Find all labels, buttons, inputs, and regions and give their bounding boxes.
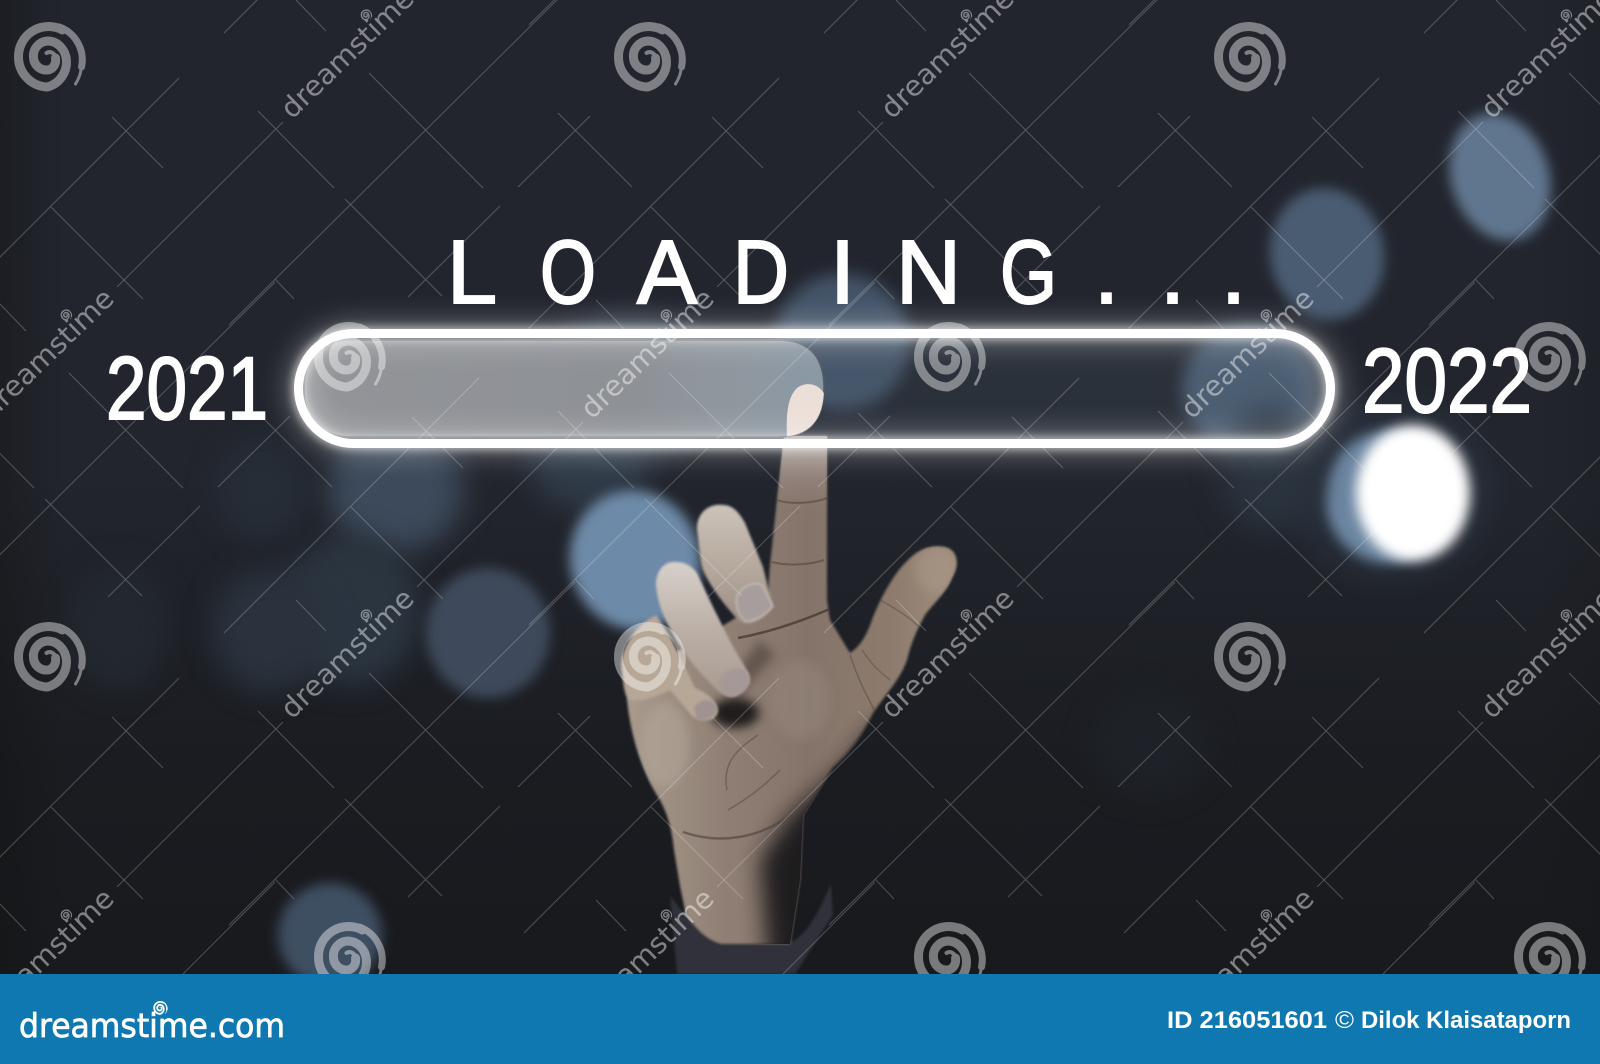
ring finger <box>656 562 750 696</box>
heading: loading: L <box>447 223 497 323</box>
heading: loading: A <box>637 223 697 323</box>
heading: loading: I <box>830 223 855 323</box>
watermark wordmarks: dreamstime <box>274 582 421 725</box>
hand pointing up <box>621 436 960 980</box>
label: year 2021: 2021 <box>106 338 268 438</box>
watermark wordmarks: dreamstime <box>1174 882 1321 1025</box>
pinky finger <box>621 615 718 720</box>
progress bar <box>298 334 1330 444</box>
footer credit: ID 216051601 <box>1167 1007 1327 1034</box>
heading: loading: O <box>540 223 596 323</box>
ring finger nail <box>719 668 749 697</box>
hand shading <box>641 436 960 980</box>
bar glass interior <box>303 338 1326 439</box>
middle finger nail <box>736 584 773 621</box>
footer credit <box>1167 1007 1571 1034</box>
watermark wordmarks: dreamstime <box>574 882 721 1025</box>
heading: loading: G <box>1000 223 1057 323</box>
pinky nail <box>694 700 717 720</box>
heading: loading: ... <box>1094 223 1246 323</box>
fingertip inside bar <box>786 384 824 436</box>
watermark wordmarks: dreamstime <box>574 282 721 425</box>
middle finger <box>697 505 773 624</box>
label: year 2022: 2022 <box>1362 331 1532 432</box>
heading: loading <box>447 223 1246 323</box>
bokeh lights <box>68 100 1567 987</box>
bar glow <box>298 334 1330 444</box>
index finger, palm and thumb <box>627 436 957 944</box>
watermark wordmarks: dreamstime <box>874 582 1021 725</box>
bar filled portion <box>304 340 824 437</box>
footer bar <box>0 974 1600 1064</box>
sleeve <box>670 883 833 974</box>
bar outline <box>298 334 1330 444</box>
footer credit: Dilok Klaisataporn <box>1361 1007 1571 1034</box>
heading: loading: N <box>896 223 961 323</box>
footer logo: dreamstime.com <box>19 1006 285 1045</box>
footer credit: © <box>1335 1007 1354 1034</box>
watermark wordmarks: dreamstime <box>1174 282 1321 425</box>
heading: loading: D <box>733 223 789 323</box>
